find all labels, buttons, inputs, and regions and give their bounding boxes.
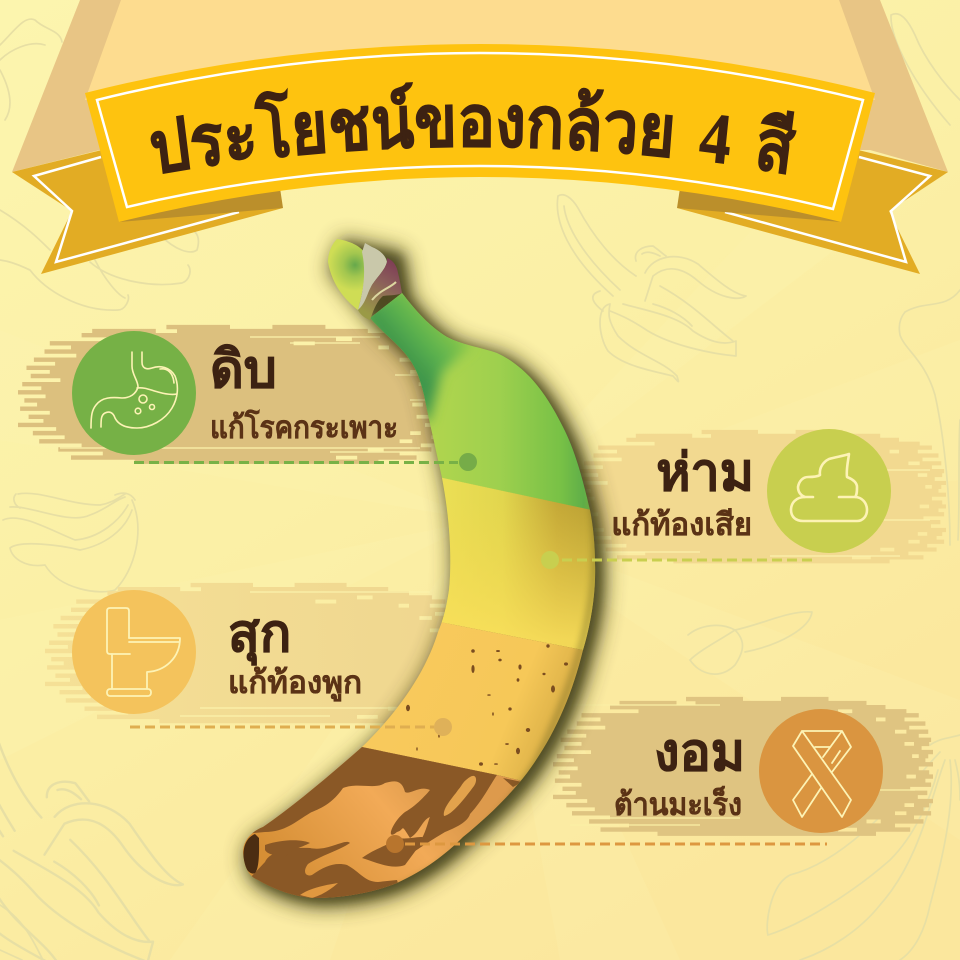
brush stroke: raw — [18, 327, 442, 462]
brown band: orange underlay — [243, 747, 521, 898]
callout: raw banana — [72, 331, 477, 471]
sublabel: constipation: แก้ท้องพูก — [228, 665, 362, 702]
icon: stool — [767, 429, 891, 553]
right ribbon tail — [677, 148, 948, 274]
sublabel: anti-cancer: ต้านมะเร็ง — [614, 785, 742, 822]
edge shading — [398, 502, 595, 882]
callout: overripe banana — [386, 709, 883, 853]
brush stroke: overripe — [553, 699, 933, 834]
brush stroke: semi-ripe — [570, 432, 946, 561]
banner back panel — [12, 0, 948, 172]
title text: ประโยชน์ของกล้วย 4 สี — [150, 82, 797, 175]
yellow band — [442, 478, 596, 650]
banana — [230, 239, 610, 910]
sublabel: stomach: แก้โรคกระเพาะ — [210, 409, 398, 445]
icon: stomach — [72, 331, 196, 455]
banana shadow — [249, 243, 602, 903]
orange streaks — [444, 776, 476, 816]
label: semi-ripe: ห่าม — [656, 445, 754, 502]
sublabel: diarrhea: แก้ท้องเสีย — [611, 507, 752, 542]
tip — [243, 834, 259, 874]
brown band: upper pattern — [252, 747, 497, 851]
label: ripe: สุก — [228, 606, 291, 666]
connector line — [134, 453, 477, 471]
left ribbon tail — [12, 148, 283, 274]
icon: ribbon — [759, 709, 883, 833]
banana body colour bands — [243, 293, 596, 898]
callout: semi-ripe banana — [541, 429, 891, 569]
title banner — [12, 0, 948, 274]
stem cap — [328, 239, 402, 320]
speckles — [406, 644, 568, 766]
connector line — [130, 718, 452, 736]
callout: ripe banana — [72, 590, 452, 736]
green band — [370, 293, 590, 510]
banner front — [85, 44, 875, 222]
connector line — [541, 551, 812, 569]
label: raw: ดิบ — [210, 342, 277, 399]
icon: toilet — [72, 590, 196, 714]
brush stroke: ripe — [45, 585, 461, 721]
connector line — [386, 835, 827, 853]
label: overripe: งอม — [654, 725, 745, 782]
orange band — [362, 622, 583, 780]
brown band: lower pattern — [252, 842, 398, 898]
